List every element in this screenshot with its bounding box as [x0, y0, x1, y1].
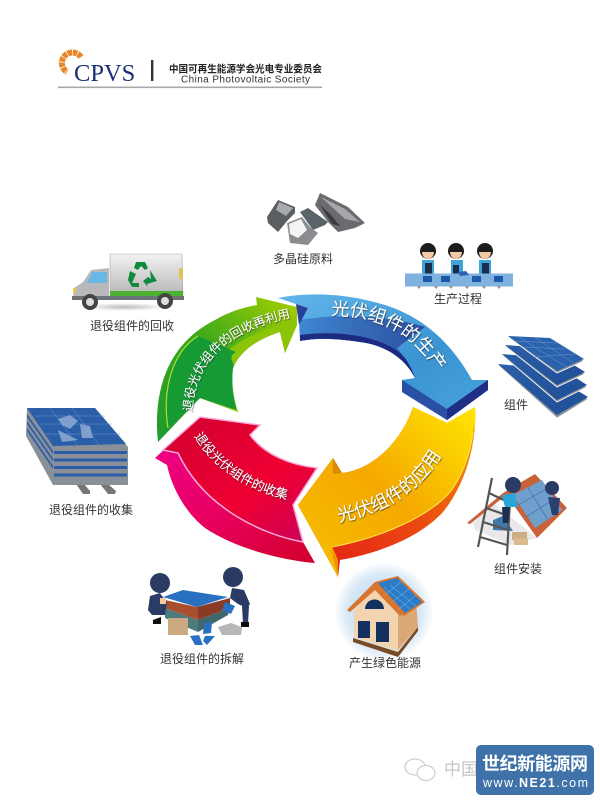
watermark text: 中国光	[444, 760, 495, 779]
CPVS wordmark: CPVS	[74, 60, 135, 87]
organisation name Chinese: 中国可再生能源学会光电专业委员会	[169, 62, 323, 76]
label: retired module collection: 退役组件的收集	[49, 502, 133, 517]
arrow: green recycling	[156, 297, 297, 442]
label: production process: 生产过程	[434, 291, 482, 306]
icon: module installation on roof	[467, 474, 567, 555]
badge title: 世纪新能源网	[482, 753, 588, 774]
organisation name English: China Photovoltaic Society	[181, 74, 310, 86]
header rule	[58, 86, 322, 88]
watermark	[405, 759, 495, 780]
arrow: yellow application	[298, 407, 476, 577]
icon: module dismantling	[148, 567, 250, 645]
label: module: 组件	[504, 398, 528, 412]
icon: recycle symbol	[128, 262, 157, 287]
logo ring icon	[62, 52, 81, 72]
arrow: blue production: 光伏组件的生产	[332, 300, 448, 368]
label: dismantling: 退役组件的拆解	[160, 651, 244, 666]
cycle diagram	[155, 294, 488, 577]
logo divider	[151, 60, 153, 81]
arrow: green recycling: 退役光伏组件的回收再利用	[182, 308, 290, 413]
icon: stack of retired modules	[26, 408, 128, 494]
arrow: blue production	[278, 294, 488, 420]
arrow: yellow application: 光伏组件的应用	[338, 449, 442, 524]
source badge	[476, 745, 594, 795]
icon: stacked solar modules	[498, 336, 588, 418]
arrow: red collection	[155, 416, 318, 563]
label: green energy: 产生绿色能源	[349, 655, 421, 670]
label: installation: 组件安装	[494, 561, 542, 576]
icon: faded recycle symbol	[58, 415, 93, 442]
icon: house with solar roof	[334, 562, 434, 662]
icon: chat bubbles	[405, 759, 435, 780]
logo header	[58, 52, 323, 88]
badge url: www.NE21.com	[482, 776, 588, 790]
icon: production line workers	[405, 243, 513, 288]
label: truck collection: 退役组件的回收	[90, 318, 174, 333]
icon: polysilicon rocks	[267, 193, 365, 245]
arrow: red collection: 退役光伏组件的收集	[194, 431, 289, 502]
label: polysilicon: 多晶硅原料	[273, 252, 333, 266]
icon: recycling truck	[72, 254, 184, 311]
